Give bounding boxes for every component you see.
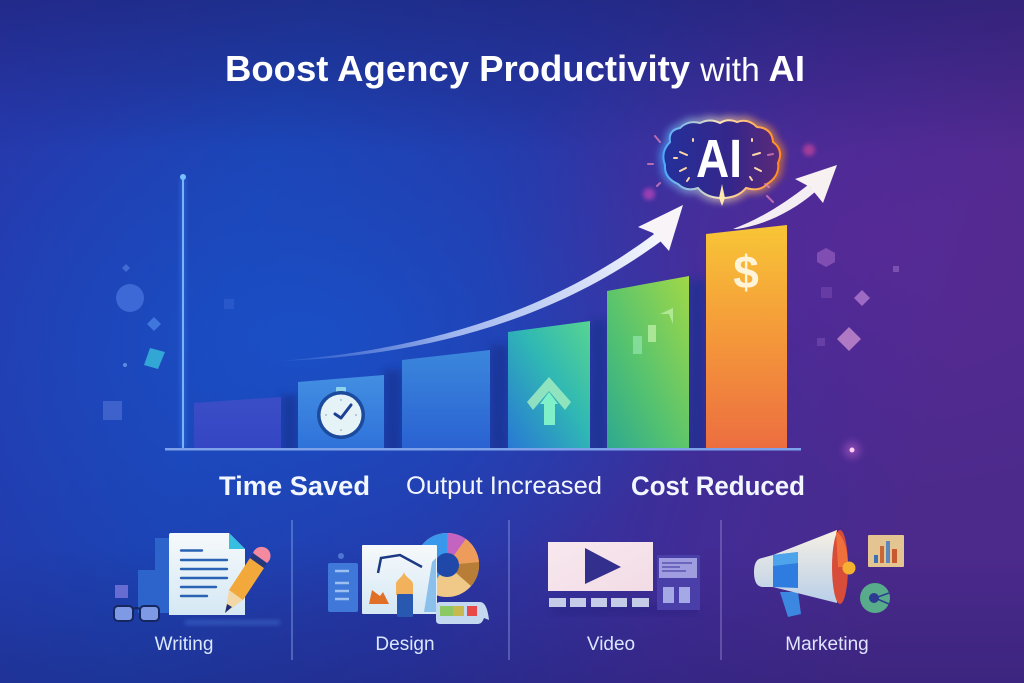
panel: writing xyxy=(114,533,280,655)
label: output increased: Output Increased xyxy=(406,472,602,500)
growth arrow 2 xyxy=(733,165,837,229)
bar 6: cost xyxy=(706,225,787,448)
icon: growth bars xyxy=(633,308,673,354)
growth arrow 1 xyxy=(280,205,683,361)
bar shadows xyxy=(281,280,706,455)
icon: megaphone xyxy=(754,530,856,617)
label: video: Video xyxy=(587,634,635,655)
label: cost reduced: Cost Reduced xyxy=(631,471,805,501)
icon: mini bar chart xyxy=(868,535,904,567)
label: writing: Writing xyxy=(155,634,213,655)
icon: video player xyxy=(548,542,700,614)
bar 2: time saved xyxy=(298,375,384,448)
icon: glasses xyxy=(114,606,159,621)
panel: marketing xyxy=(754,530,904,655)
vertical axis xyxy=(180,174,186,448)
sparkles xyxy=(643,136,815,202)
decorative shapes: left xyxy=(103,264,234,420)
palette card xyxy=(436,602,489,624)
label: marketing: Marketing xyxy=(785,634,869,655)
color wheel xyxy=(415,533,479,597)
chart labels xyxy=(219,471,805,501)
icon: dollar sign: $ xyxy=(733,246,759,298)
panel: design xyxy=(328,533,489,655)
icon: up arrow xyxy=(527,377,571,425)
bar chart xyxy=(165,174,801,455)
bar 3 xyxy=(402,350,490,448)
icon: pie chart xyxy=(860,583,890,613)
icon: AI brain xyxy=(643,120,815,206)
decorative shapes: right xyxy=(817,248,899,458)
bar 1 xyxy=(194,397,281,448)
label: design: Design xyxy=(375,634,435,655)
title: Boost Agency Productivity with AI xyxy=(225,48,805,89)
icon: design artwork xyxy=(328,533,489,624)
icon: stopwatch xyxy=(317,387,365,439)
icon: writing document xyxy=(114,533,280,625)
AI label: AI xyxy=(696,129,742,189)
bar 5 xyxy=(607,276,689,448)
horizontal axis xyxy=(165,448,801,450)
label: time saved: Time Saved xyxy=(219,471,370,501)
icon: pencil xyxy=(225,547,271,613)
bar 4: output xyxy=(508,321,590,448)
panel: video xyxy=(548,542,700,655)
